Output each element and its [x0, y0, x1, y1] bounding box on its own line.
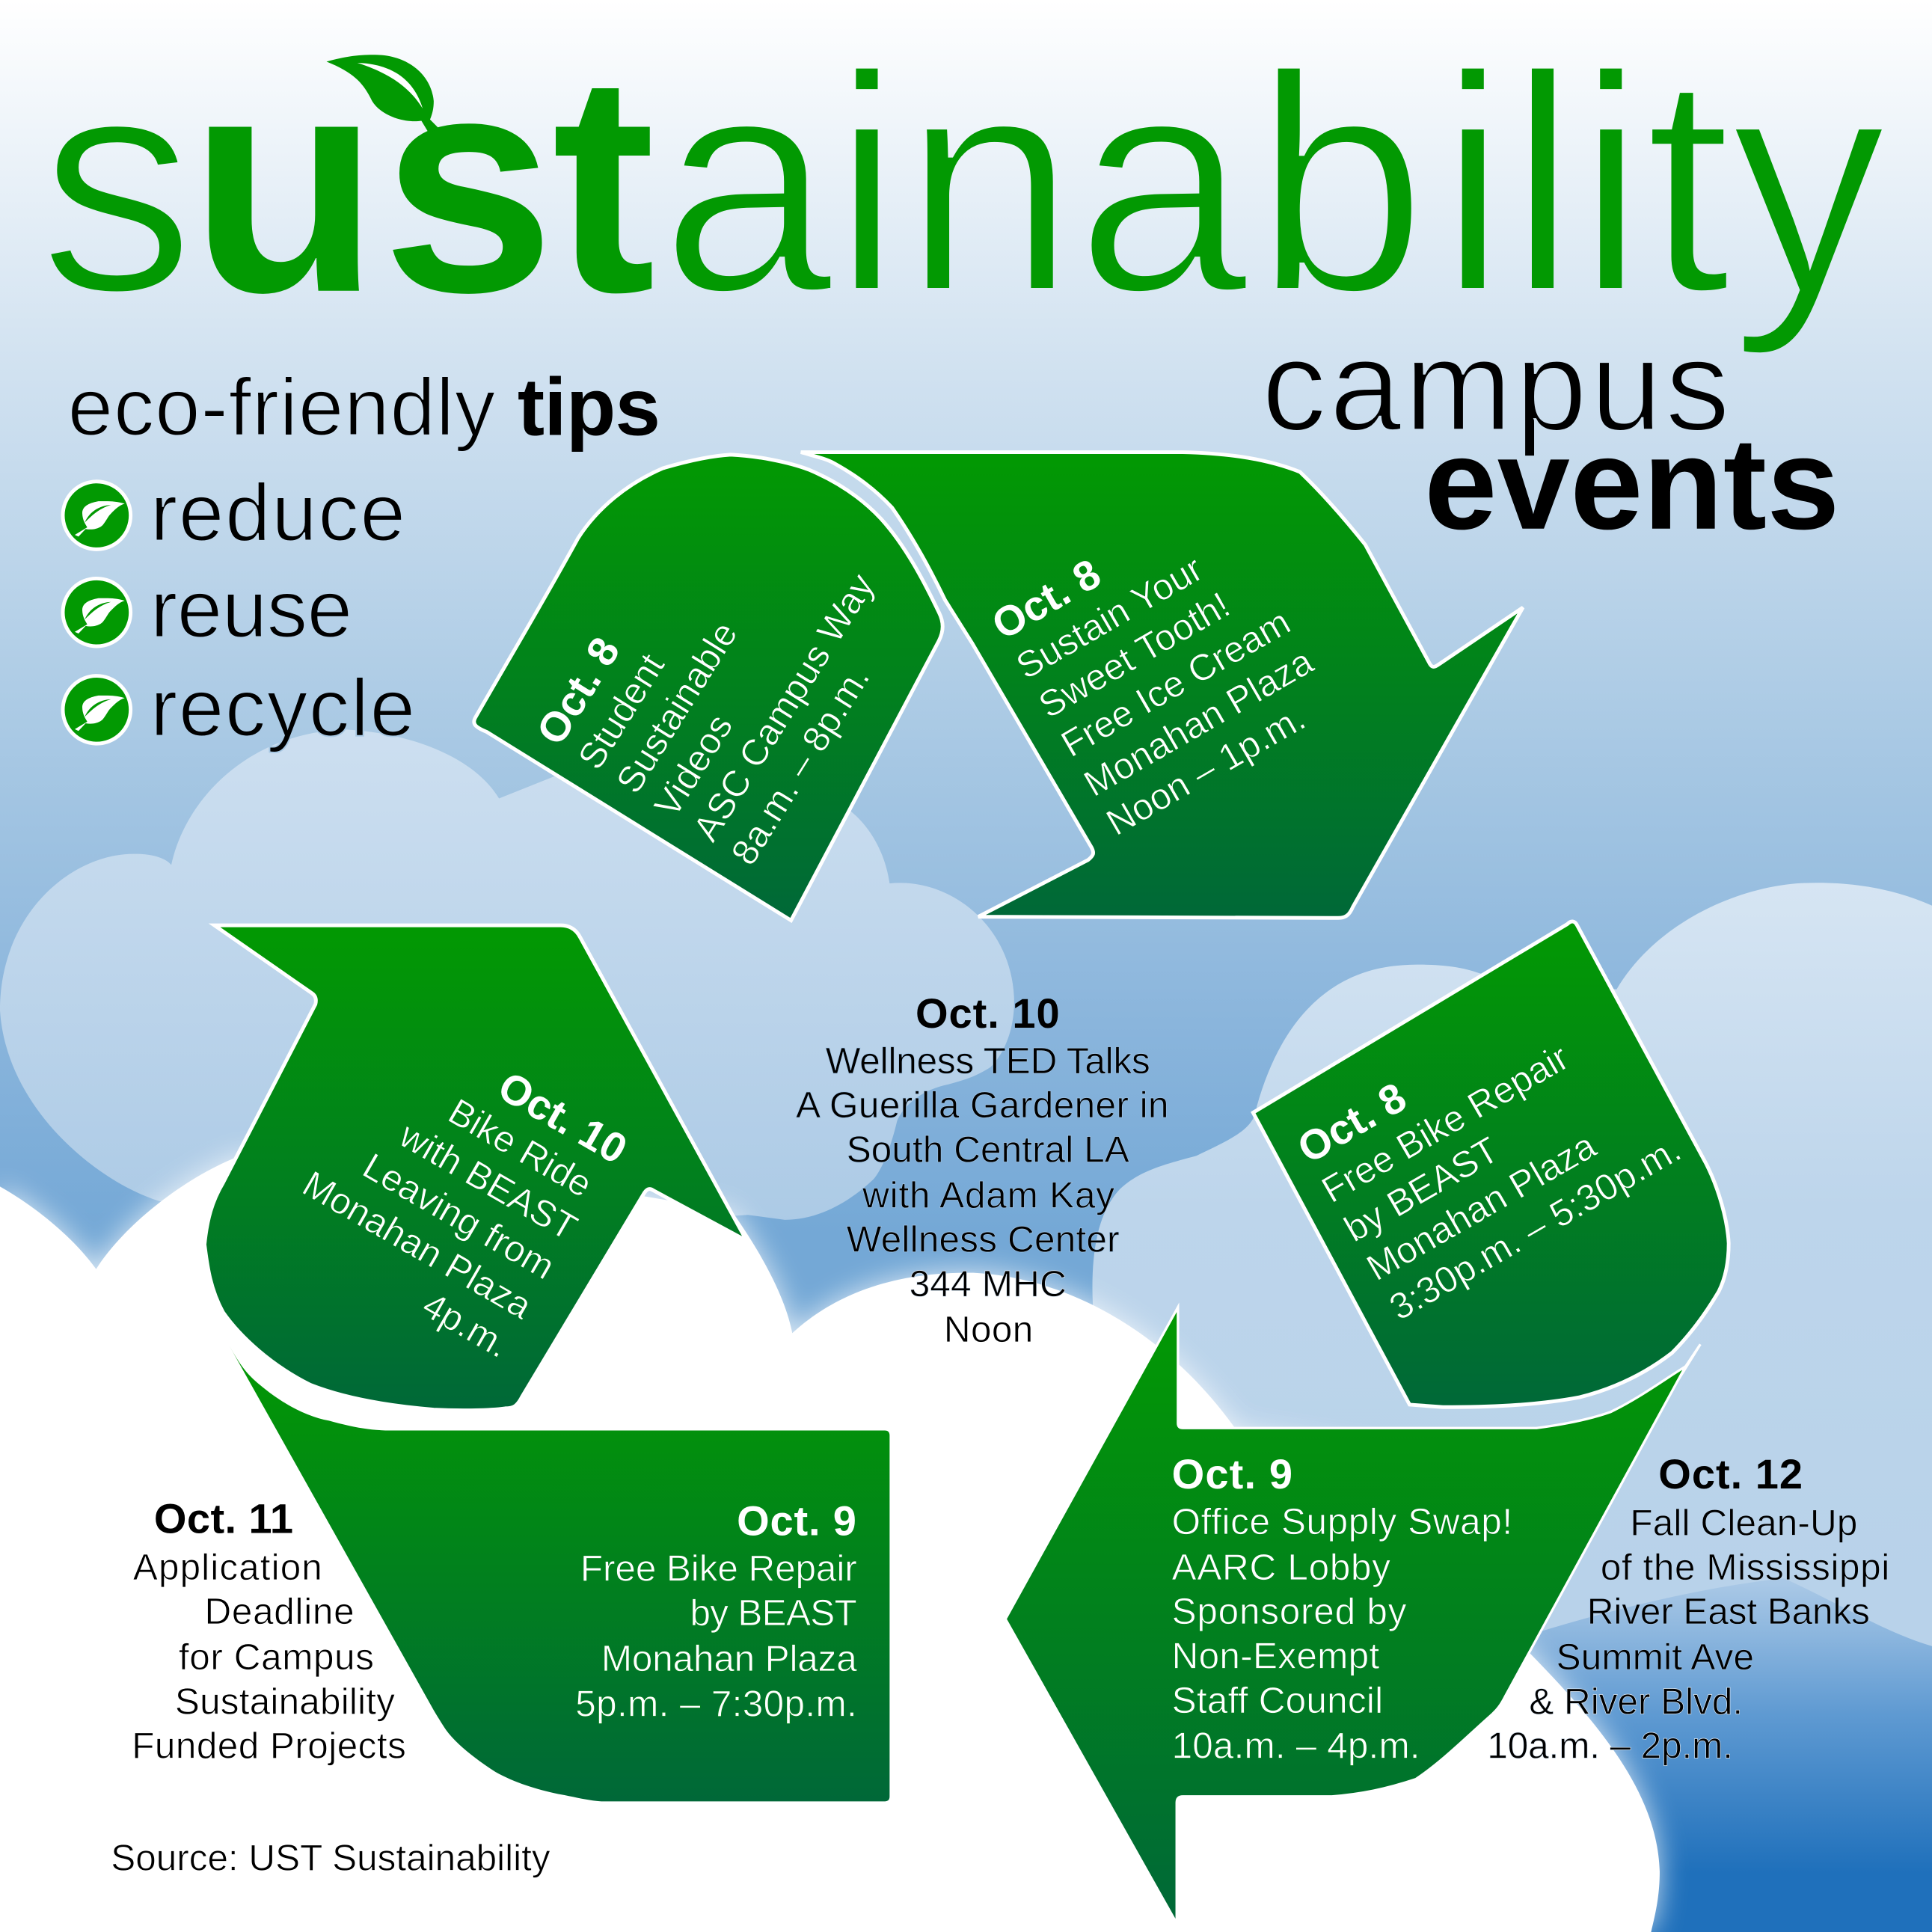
icon: leaf badge: [63, 578, 131, 646]
event text: Sustain Your: [1009, 548, 1209, 687]
cloud: dark blue lower right: [1479, 1578, 1932, 1932]
title: sustainability: ust: [190, 10, 655, 357]
text block: Oct. 10 Wellness TED Talks: Wellness TED Talks: [826, 1040, 1150, 1082]
event text: Sustainable: [608, 615, 746, 800]
icon: leaf badge: [63, 482, 131, 549]
text block: Oct. 11 Application Deadline: [132, 1494, 405, 1767]
tip: recycle: [63, 663, 415, 753]
arrow shape: [1253, 921, 1729, 1407]
event text: Noon – 1p.m.: [1100, 697, 1312, 844]
event text: Free Ice Cream: [1055, 601, 1297, 765]
cloud: white glow: [0, 1156, 1660, 1932]
title: sustainability: [40, 10, 1886, 359]
text block: Oct. 11 Application Deadline: for Campus: [179, 1637, 373, 1678]
label: recycle: recycle: [150, 663, 415, 753]
event text: AARC Lobby: [1172, 1547, 1390, 1588]
tip: reuse: [63, 565, 352, 655]
title: sustainability: ainability: [660, 10, 1886, 359]
label: reduce: reduce: [150, 467, 405, 558]
cloud: left: [0, 729, 1014, 1232]
text block: Oct. 10 Wellness TED Talks: Oct. 10: [916, 990, 1060, 1037]
text block: Oct. 10 Wellness TED Talks: A Guerilla Gardener in: [796, 1085, 1168, 1126]
event text: [984, 479, 1343, 844]
event text: with BEAST: [392, 1114, 584, 1248]
event text: Monahan Plaza: [1077, 640, 1320, 805]
arrow panel: Oct. 8 Sustain Your Sweet Tooth: [801, 453, 1523, 918]
arrow shape: [204, 925, 746, 1411]
icon: title leaf: [327, 55, 438, 133]
event text: by BEAST: [1337, 1129, 1506, 1250]
text block: Oct. 10 Wellness TED Talks: with Adam Kay: [862, 1174, 1114, 1215]
event text: Oct. 8: [527, 629, 629, 752]
arrow shape: [229, 1346, 889, 1801]
text block: Oct. 12 Fall Clean-Up: [1487, 1450, 1889, 1767]
text block: Oct. 10 Wellness TED Talks: South Central LA: [847, 1129, 1129, 1170]
event text: Leaving from: [356, 1145, 562, 1288]
heading: campus events: events: [1424, 411, 1839, 557]
title: sustainability: s: [40, 10, 194, 357]
text block: Oct. 10 Wellness TED Talks: [796, 990, 1168, 1350]
icon: leaf badge: [63, 676, 131, 743]
event text: [1172, 1450, 1512, 1767]
text block: Oct. 10 Wellness TED Talks: Noon: [944, 1309, 1032, 1350]
event text: by BEAST: [690, 1592, 857, 1634]
event text: [527, 467, 921, 872]
text block: Oct. 11 Application Deadline: Application: [133, 1547, 322, 1588]
event text: Monahan Plaza: [295, 1163, 539, 1328]
text block: Oct. 12 Fall Clean-Up: & River Blvd.: [1529, 1681, 1742, 1722]
event text: Oct. 8: [1289, 1073, 1414, 1172]
label: reuse: reuse: [150, 565, 352, 655]
cloud: right: [1092, 883, 1932, 1725]
text block: Oct. 10 Wellness TED Talks: Wellness Center: [847, 1219, 1119, 1260]
arrow shape: [1005, 1307, 1686, 1923]
text block: Oct. 11 Application Deadline: Oct. 11: [154, 1494, 293, 1542]
event text: 10a.m. – 4p.m.: [1172, 1726, 1420, 1767]
event text: Oct. 10: [491, 1062, 635, 1173]
event text: [273, 1002, 635, 1368]
arrow shape: [474, 455, 942, 921]
event text: Non-Exempt: [1172, 1635, 1379, 1676]
event text: Sponsored by: [1172, 1591, 1407, 1632]
text block: Oct. 11 Application Deadline: Deadline: [204, 1591, 354, 1632]
event text: Oct. 8: [984, 550, 1108, 648]
text block: Oct. 10 Wellness TED Talks: 344 MHC: [910, 1263, 1066, 1304]
event text: Office Supply Swap!: [1172, 1501, 1512, 1542]
heading: eco-friendly tips: tips: [518, 363, 660, 453]
event text: Free Bike Repair: [1315, 1037, 1575, 1211]
event text: 3:30p.m. – 5:30p.m.: [1383, 1129, 1688, 1328]
event text: ASC Campus Way: [685, 566, 883, 848]
arrow shape: [801, 453, 1523, 918]
arrow panel: Oct. 8 Student Sustainable Videos: [474, 455, 942, 921]
cloud: white foreground: [0, 1156, 1660, 1932]
event text: Monahan Plaza: [1360, 1125, 1603, 1289]
heading: campus events: campus: [1262, 313, 1730, 458]
event text: Free Bike Repair: [580, 1548, 856, 1589]
text block: Oct. 12 Fall Clean-Up: of the Mississippi: [1601, 1547, 1889, 1588]
event text: 5p.m. – 7:30p.m.: [575, 1684, 856, 1725]
event text: 4p.m.: [416, 1284, 516, 1366]
event text: Student: [570, 646, 672, 776]
event text: Bike Ride: [441, 1091, 599, 1206]
text block: Oct. 12 Fall Clean-Up: 10a.m. – 2p.m.: [1487, 1726, 1732, 1767]
text block: Oct. 11 Application Deadline: Funded Projects: [132, 1726, 405, 1767]
event text: Sweet Tooth!: [1031, 584, 1237, 726]
arrow panel: Oct. 9 Free Bike Repair: [229, 1346, 889, 1801]
event text: [1289, 967, 1688, 1328]
tip: reduce: [63, 467, 405, 558]
heading: eco-friendly tips: eco-friendly: [68, 363, 496, 453]
arrow panel: Oct. 8 Free Bike Repair by BEAST: [1253, 921, 1729, 1407]
text block: Oct. 12 Fall Clean-Up: Fall Clean-Up: [1630, 1503, 1857, 1544]
white outline spike: [1678, 1344, 1700, 1380]
event text: Oct. 9: [1172, 1450, 1292, 1497]
event text: Oct. 9: [737, 1497, 856, 1545]
event text: Staff Council: [1172, 1680, 1382, 1721]
text block: Oct. 12 Fall Clean-Up: Summit Ave: [1557, 1637, 1753, 1678]
text block: Oct. 11 Application Deadline: Sustainability: [175, 1681, 395, 1722]
event text: Videos: [646, 707, 740, 824]
heading: campus events: [1262, 313, 1839, 557]
event text: 8a.m. – 8p.m.: [723, 659, 878, 872]
arrow panel: Oct. 10 Bike Ride: [204, 925, 746, 1411]
text block: Oct. 12 Fall Clean-Up: Oct. 12: [1658, 1450, 1803, 1497]
event text: [575, 1497, 857, 1725]
event text: Monahan Plaza: [601, 1638, 857, 1679]
arrow panel: Oct. 9 Office Supply Swap: [1005, 1307, 1700, 1923]
source note: Source: UST Sustainability: [111, 1838, 551, 1879]
text block: Oct. 12 Fall Clean-Up: River East Banks: [1587, 1591, 1869, 1632]
